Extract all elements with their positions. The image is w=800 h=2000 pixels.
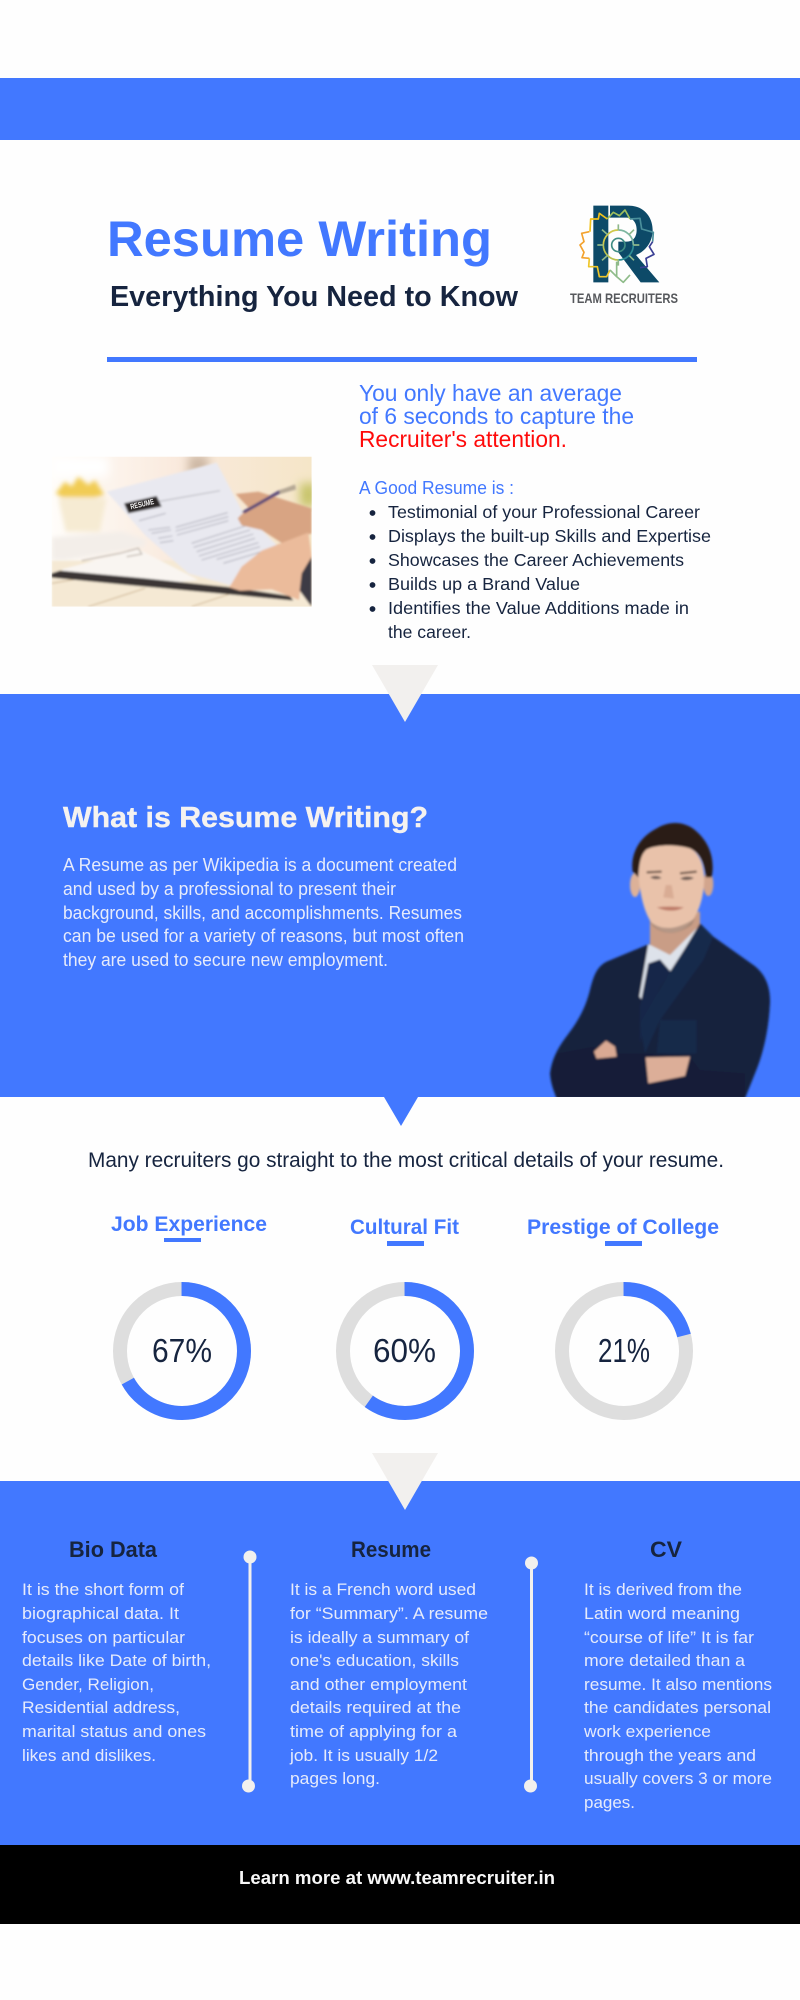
bullet list: the career. (388, 622, 471, 642)
column text: It is a French word used (290, 1580, 476, 1599)
column text: It is the short form of (22, 1580, 184, 1599)
paragraph: definition: and used by a professional to present their (63, 879, 396, 899)
column text (22, 1580, 211, 1765)
list heading: A Good Resume is : (359, 478, 514, 498)
bullet list: Identifies the Value Additions made in (388, 598, 689, 618)
heading: what is resume writing: What is Resume Writing? (63, 802, 428, 834)
timeline divider 2 (524, 1556, 538, 1792)
column text: focuses on particular (22, 1628, 185, 1647)
paragraph: definition (63, 855, 464, 970)
column text (289, 1580, 488, 1788)
stat value: 60% (373, 1332, 436, 1369)
column text: “course of life” It is far (584, 1628, 754, 1647)
subtitle: Everything You Need to Know (110, 281, 518, 313)
arrow: down from blue panel (384, 1097, 418, 1126)
column heading: Resume (351, 1537, 431, 1562)
paragraph: definition: can be used for a variety of reasons, but most often (63, 926, 464, 946)
callout: 6 seconds: You only have an average (359, 380, 622, 406)
column text: Residential address, (22, 1698, 180, 1717)
footer bar (0, 1845, 800, 1924)
column text: pages long. (290, 1769, 380, 1788)
stat label: Job Experience (111, 1213, 267, 1236)
bullet list: Showcases the Career Achievements (388, 550, 684, 570)
top banner (0, 78, 800, 140)
paragraph: definition: background, skills, and accomplishments. Resumes (63, 903, 462, 923)
column text: is ideally a summary of (290, 1628, 469, 1647)
column text: likes and dislikes. (22, 1746, 156, 1765)
bullet list: Testimonial of your Professional Career (388, 502, 700, 522)
panel: bio data resume cv (0, 1481, 800, 1845)
timeline divider 1 (242, 1550, 256, 1792)
stat label: Prestige of College (527, 1216, 719, 1239)
column text: resume. It also mentions (584, 1675, 772, 1694)
photo: businessman with crossed arms (550, 823, 770, 1098)
column: resume (289, 1537, 488, 1788)
resume label on photo: RESUME (129, 497, 155, 511)
arrow: down into blue panel (372, 665, 438, 722)
bullet list (370, 502, 711, 642)
column text: biographical data. It (22, 1604, 179, 1623)
header: title block (107, 211, 518, 313)
paragraph: definition: they are used to secure new employment. (63, 950, 388, 970)
callout: 6 seconds: of 6 seconds to capture the (359, 403, 634, 429)
donut chart (120, 1289, 244, 1413)
column text: details like Date of birth, (22, 1651, 211, 1670)
bullet list: Builds up a Brand Value (388, 574, 580, 594)
column text: Gender, Religion, (22, 1675, 154, 1694)
statement: recruiters: Many recruiters go straight to the most critical details of your resume. (88, 1149, 724, 1172)
logo: team recruiters (570, 206, 678, 306)
stat value: 67% (152, 1332, 212, 1369)
column text: more detailed than a (584, 1651, 746, 1670)
column text: time of applying for a (290, 1722, 458, 1741)
bullet list: Displays the built-up Skills and Expertise (388, 526, 711, 546)
column text: work experience (583, 1722, 711, 1741)
donut chart (343, 1289, 467, 1413)
column text: It is derived from the (584, 1580, 742, 1599)
logo wordmark: TEAM RECRUITERS (570, 290, 678, 306)
column text: marital status and ones (22, 1722, 206, 1741)
callout: 6 seconds: Recruiter's attention. (359, 426, 567, 452)
column: bio data (22, 1537, 211, 1765)
column heading: CV (650, 1537, 682, 1562)
column text: the candidates personal (584, 1698, 771, 1717)
arrow: down into comparison panel (372, 1453, 438, 1510)
donut chart (562, 1289, 686, 1413)
column text: job. It is usually 1/2 (289, 1746, 438, 1765)
column text: and other employment (290, 1675, 467, 1694)
header divider (107, 357, 697, 362)
callout: 6 seconds (359, 380, 634, 452)
column heading: Bio Data (69, 1537, 158, 1562)
column text: through the years and (584, 1746, 756, 1765)
paragraph: definition: A Resume as per Wikipedia is a document created (63, 855, 457, 875)
column text: one's education, skills (290, 1651, 459, 1670)
column: cv (583, 1537, 772, 1812)
column text: usually covers 3 or more (584, 1769, 772, 1788)
stat: job experience 67% (111, 1213, 267, 1413)
column text: pages. (584, 1793, 635, 1812)
stat label: Cultural Fit (350, 1216, 459, 1239)
column text: details required at the (290, 1698, 461, 1717)
stat: prestige of college 21% (527, 1216, 719, 1413)
column text: for “Summary”. A resume (290, 1604, 488, 1623)
title: Resume Writing (107, 211, 492, 267)
column text: Latin word meaning (584, 1604, 740, 1623)
photo: hands holding a resume (52, 455, 317, 607)
stat value: 21% (598, 1332, 650, 1369)
stat: cultural fit 60% (343, 1216, 467, 1413)
footer text: Learn more at www.teamrecruiter.in (239, 1868, 555, 1888)
column text (583, 1580, 772, 1812)
panel: what is resume writing (0, 694, 800, 1097)
